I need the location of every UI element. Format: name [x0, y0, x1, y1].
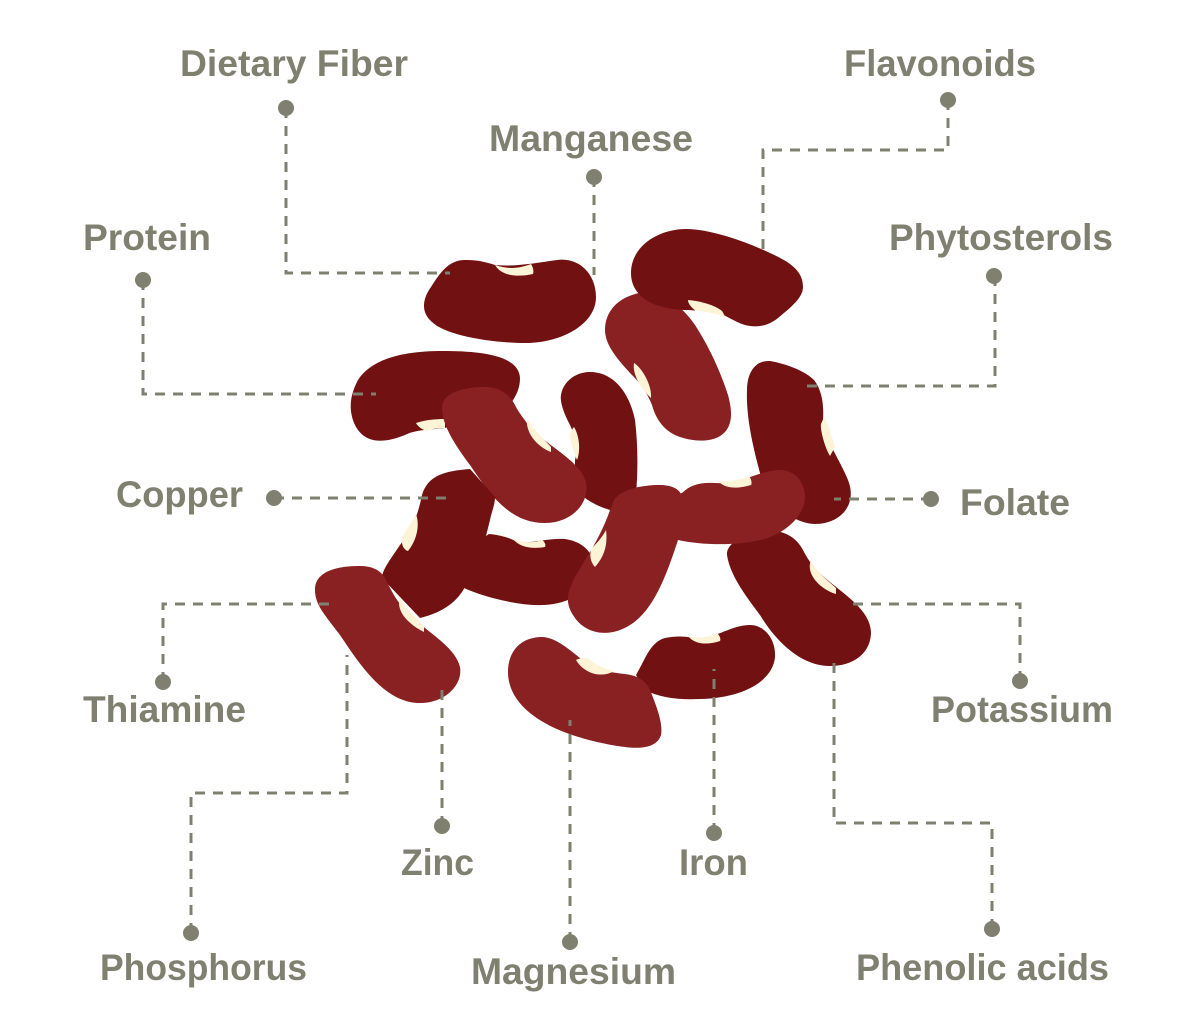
bean: center dark: [561, 372, 637, 510]
callout: Copper: [116, 474, 451, 515]
callout: Folate: Folate: [960, 482, 1070, 523]
bean: mid lower dark: [450, 534, 592, 605]
callout: Zinc: [401, 686, 474, 883]
callout: Folate: [834, 482, 1070, 523]
bean: center light: [442, 387, 587, 523]
bean: upper right light: [605, 292, 731, 441]
callout: Potassium: [852, 604, 1113, 730]
bean: vertical light: [568, 485, 683, 633]
bean: left dark: [351, 351, 520, 441]
callout: Flavonoids: Flavonoids: [844, 43, 1036, 84]
callout: Phenolic acids: Phenolic acids: [856, 947, 1109, 988]
callout: Dietary Fiber: [180, 43, 450, 273]
callout: Thiamine: Thiamine: [83, 689, 246, 730]
callout: Dietary Fiber: Dietary Fiber: [180, 43, 408, 84]
callout: Phosphorus: [100, 655, 347, 988]
callout: Potassium: Potassium: [931, 689, 1113, 730]
bean: upper right dark: [631, 229, 803, 326]
callout: Protein: Protein: [83, 217, 211, 258]
callout: Thiamine: [83, 604, 330, 730]
callout: Magnesium: Magnesium: [471, 951, 676, 992]
callout: Iron: [679, 669, 748, 883]
bean: bottom light: [508, 637, 661, 748]
callout: Phenolic acids: [834, 655, 1109, 988]
bean: lower left dark: [382, 469, 495, 618]
callout: Phytosterols: [806, 217, 1113, 386]
callout: Zinc: Zinc: [401, 842, 474, 883]
bean cluster: [315, 229, 871, 748]
callout: Phytosterols: Phytosterols: [889, 217, 1113, 258]
bean: right dark: [747, 361, 851, 524]
bean: bottom dark: [636, 625, 775, 699]
callout: Copper: Copper: [116, 474, 243, 515]
bean: top dark: [424, 260, 596, 343]
callout: Iron: Iron: [679, 842, 748, 883]
bean: far left light: [315, 566, 460, 703]
callout: Flavonoids: [763, 43, 1036, 256]
callout: Protein: [83, 217, 376, 394]
bean: horizontal light: [660, 470, 805, 544]
callout: Manganese: Manganese: [489, 118, 693, 159]
bean: lower right dark: [727, 531, 871, 666]
callout: Magnesium: [471, 720, 676, 992]
callout: Phosphorus: Phosphorus: [100, 947, 307, 988]
callout: Manganese: [489, 118, 693, 275]
